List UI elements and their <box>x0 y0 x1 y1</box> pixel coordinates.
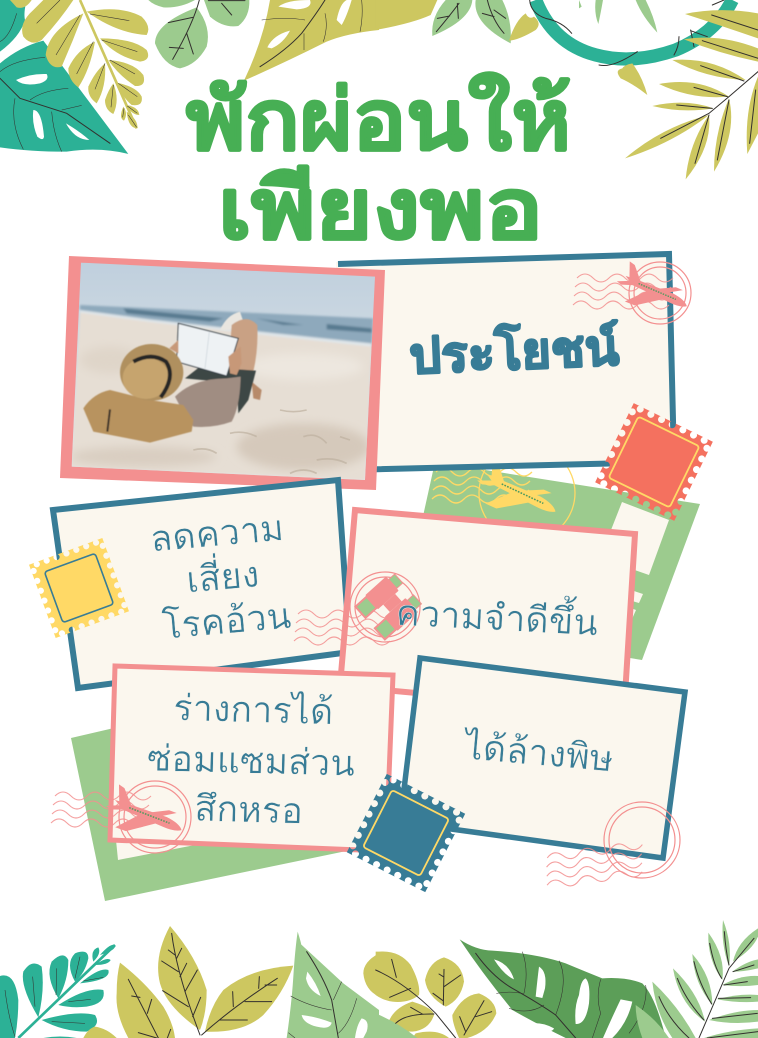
compound leaf olive <box>10 0 148 128</box>
text <box>149 507 293 647</box>
title: พักผ่อนให้ <box>186 72 571 167</box>
stamp: yellow <box>29 538 129 638</box>
big leaf olive <box>244 0 379 81</box>
text: สึกหรอ <box>194 788 303 831</box>
card: body repairs worn parts <box>51 666 393 853</box>
text: ร่างการได้ <box>173 687 334 732</box>
text: เสี่ยง <box>184 549 261 601</box>
small olive leaf <box>509 13 539 41</box>
small light green leaves <box>432 0 657 43</box>
light green monstera <box>287 932 379 1038</box>
yellow postmark <box>432 445 575 541</box>
card: reduce obesity risk <box>53 480 350 688</box>
hanging leaf <box>618 63 647 95</box>
olive round leaves <box>376 951 496 1038</box>
teal ring <box>536 0 732 59</box>
text: ความจำดีขึ้น <box>395 586 599 643</box>
olive leaves <box>83 926 293 1038</box>
photo: person reading on the beach <box>60 256 385 490</box>
title <box>186 72 571 256</box>
postmark with plane <box>573 260 694 324</box>
text: ได้ล้างพิษ <box>460 725 615 779</box>
stamp: teal <box>347 774 465 892</box>
heading: benefits: ประโยชน์ <box>408 317 621 385</box>
postmark <box>543 802 680 889</box>
olive leaf at edge <box>363 953 379 997</box>
top-left foliage <box>0 0 379 154</box>
continuation of big leaf <box>376 0 437 30</box>
text: โรคอ้วน <box>160 595 293 647</box>
text: ลดความ <box>149 507 285 559</box>
vine <box>530 0 724 66</box>
monstera leaf teal <box>0 0 128 154</box>
dark green monstera <box>460 939 666 1038</box>
teal compound leaf <box>0 945 115 1038</box>
postmark with binoculars <box>294 571 424 645</box>
card: detox <box>400 658 685 889</box>
back card: green top right <box>400 445 700 660</box>
palm leaflets olive <box>625 10 758 179</box>
text: ซ่อมแซมส่วน <box>147 737 355 784</box>
round leaves light green <box>148 0 249 68</box>
stamp: red <box>595 403 713 521</box>
text <box>145 686 357 833</box>
postmark with plane <box>51 781 191 853</box>
title: เพียงพอ <box>218 162 543 256</box>
card: benefits heading <box>336 251 694 471</box>
back card: green bottom left <box>71 700 385 901</box>
bottom-left foliage <box>0 926 379 1038</box>
top-right foliage <box>376 0 758 179</box>
light green leaf overlay <box>636 920 758 1038</box>
bottom-right foliage <box>376 920 758 1038</box>
card: better memory <box>294 510 635 712</box>
